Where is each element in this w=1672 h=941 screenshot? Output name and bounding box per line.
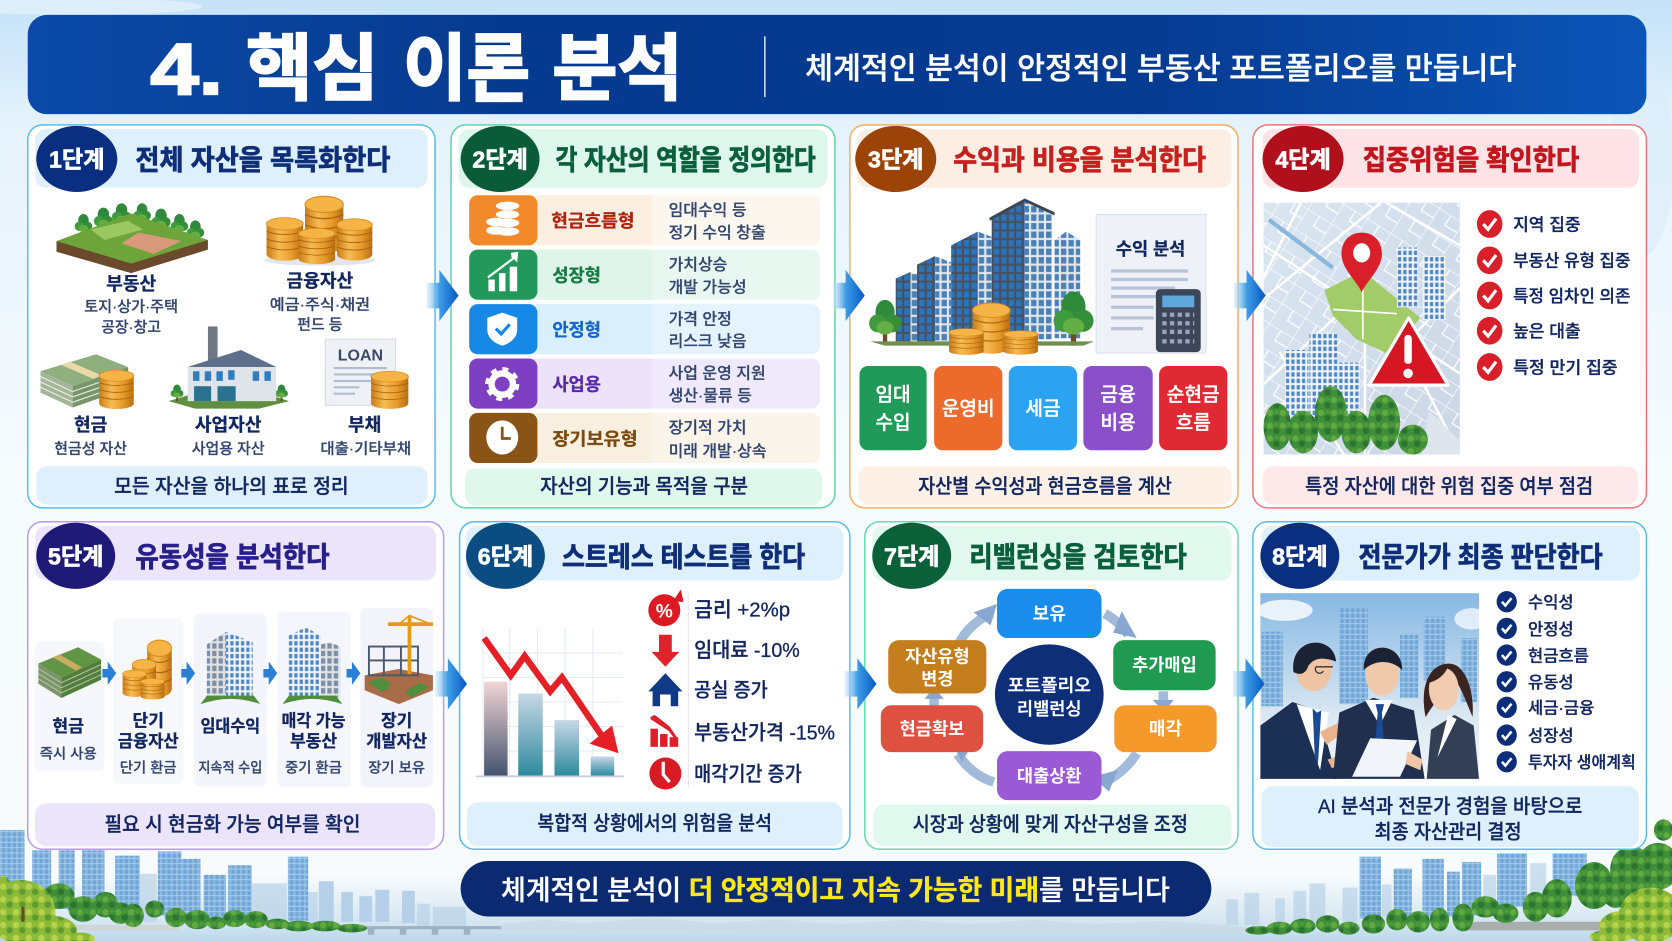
liquidity column: sellable real estate: 부동산	[290, 732, 337, 751]
icon: house	[648, 673, 682, 706]
row: stable	[469, 304, 820, 354]
expert criteria checklist: 현금흐름	[1528, 646, 1589, 665]
step 2 summary: 자산의 기능과 목적을 구분	[540, 476, 748, 498]
cycle node: hold: 보유	[1033, 604, 1066, 624]
cash-flow tiles: 수입	[875, 412, 911, 434]
cash-flow tiles: 흐름	[1176, 413, 1211, 434]
illustration: experts reviewing	[1257, 593, 1489, 779]
liquidity column: cash: 현금	[53, 717, 84, 736]
arrow: step 1 to 2	[427, 270, 459, 321]
step 1 heading	[35, 126, 428, 192]
cycle node: repay loan	[997, 751, 1102, 800]
row: long-term: 미래 개발·상속	[669, 443, 767, 461]
panel: step 5	[28, 522, 444, 849]
cycle node: change asset type: 변경	[921, 669, 953, 689]
illustration: apartment buildings and coins	[869, 198, 1094, 355]
row: stable: 안정형	[552, 320, 601, 340]
expert: center man	[1333, 648, 1425, 779]
liquidity column: short-term financial: 금융자산	[118, 732, 179, 751]
liquidity column: long-term development	[360, 608, 433, 787]
main title: 분석	[552, 29, 682, 110]
liquidity column: sellable real estate	[277, 611, 351, 787]
icon: loan document: LOAN	[338, 348, 383, 365]
step 5 summary: 필요 시 현금화 가능 여부를 확인	[104, 814, 360, 836]
asset: debt	[320, 415, 411, 457]
concentration checklist	[1477, 210, 1630, 381]
cash-flow tiles: 세금	[1025, 398, 1061, 420]
cycle center	[995, 644, 1104, 745]
row: cash flow: 임대수익 등	[669, 202, 747, 220]
step 6 heading	[466, 523, 843, 589]
step 1 summary: 모든 자산을 하나의 표로 정리	[114, 476, 349, 498]
step 3 heading: 3단계	[868, 146, 923, 173]
step 6 summary	[467, 802, 842, 846]
title banner	[28, 15, 1646, 114]
arrow: step 6 to 7	[845, 658, 877, 709]
concentration checklist: 특정 임차인 의존	[1513, 287, 1630, 306]
row: business use: 사업용	[552, 374, 601, 394]
icon: interest rate up	[648, 592, 682, 626]
step 8 heading	[1260, 523, 1640, 589]
step 2 heading	[459, 126, 827, 192]
cycle node: secure cash	[881, 705, 983, 752]
row: long-term: 장기적 가치	[669, 419, 747, 437]
asset: real estate: 토지·상가·주택	[84, 299, 178, 316]
illustration: profit analysis document	[1096, 214, 1206, 353]
icon: loan document	[325, 339, 408, 409]
cycle arrows	[934, 612, 1163, 782]
small flow arrows	[102, 661, 360, 685]
stress scenario list: 금리 +2%p	[694, 599, 790, 622]
step 7 heading: 7단계	[884, 543, 939, 569]
step 5 heading	[35, 523, 436, 589]
row: growth	[469, 250, 820, 300]
cycle center: 포트폴리오	[1008, 675, 1091, 695]
asset: financial: 펀드 등	[297, 317, 343, 334]
row: growth: 가치상승	[669, 256, 727, 274]
asset: cash: 현금성 자산	[54, 440, 127, 457]
step 7 summary: 시장과 상황에 맞게 자산구성을 조정	[913, 814, 1188, 836]
step 3 summary: 자산별 수익성과 현금흐름을 계산	[918, 476, 1172, 498]
step 4 heading	[1263, 126, 1639, 192]
icon: cash	[41, 354, 134, 409]
document in hands	[1352, 738, 1417, 777]
liquidity column: cash	[35, 641, 104, 771]
cycle node: change asset type	[888, 640, 986, 693]
cycle node: sell: 매각	[1149, 719, 1182, 739]
step 5 heading: 5단계	[48, 543, 103, 569]
step 7 heading: 리밸런싱을 검토한다	[969, 542, 1187, 573]
stress scenario list: 임대료 -10%	[694, 639, 800, 662]
row: long-term	[469, 413, 820, 463]
cash-flow tiles: 금융	[1100, 385, 1136, 406]
asset: real estate: 부동산	[106, 274, 156, 294]
expert: left man	[1260, 643, 1351, 779]
step 1 heading: 전체 자산을 목록화한다	[135, 145, 390, 176]
step 5 heading: 유동성을 분석한다	[135, 542, 329, 573]
expert criteria checklist: 성장성	[1528, 726, 1574, 745]
step 7 heading	[872, 523, 1232, 589]
cash-flow tiles: 비용	[1100, 412, 1136, 434]
step 4 summary	[1263, 466, 1638, 505]
step 6 summary: 복합적 상황에서의 위험을 분석	[537, 813, 772, 835]
step 4 heading: 4단계	[1275, 146, 1331, 173]
liquidity column: rental income	[194, 613, 267, 786]
cash-flow tiles: 순현금	[1167, 384, 1220, 406]
icon: calculator	[1156, 289, 1201, 352]
expert criteria checklist: 수익성	[1528, 593, 1574, 612]
expert criteria checklist	[1497, 591, 1636, 772]
liquidity column: long-term development: 장기	[381, 712, 412, 731]
panel: step 3	[850, 125, 1238, 508]
illustration: risk map	[1264, 203, 1460, 454]
liquidity column: sellable real estate: 매각 가능	[282, 712, 345, 731]
step 8 summary: AI 분석과 전문가 경험을 바탕으로	[1318, 796, 1582, 818]
liquidity column: short-term financial: 단기 환금	[120, 759, 177, 776]
icon: interest rate up: %	[656, 602, 673, 623]
expert criteria checklist: 투자자 생애계획	[1528, 753, 1636, 772]
main title: 핵심	[246, 29, 379, 110]
step 5 summary	[35, 803, 435, 846]
panel: step 2	[451, 125, 835, 508]
row: growth: 성장형	[552, 266, 601, 286]
icon: coins	[264, 196, 375, 266]
step 3 summary	[858, 466, 1232, 505]
panel: step 6	[460, 522, 850, 849]
main title: 4.	[150, 29, 223, 110]
row: long-term: 장기보유형	[552, 429, 638, 449]
asset: real estate: 공장·창고	[101, 319, 161, 336]
concentration checklist: 특정 만기 집중	[1513, 358, 1618, 377]
asset: financial: 금융자산	[287, 271, 354, 291]
liquidity column: short-term financial	[113, 619, 183, 784]
concentration checklist: 지역 집중	[1513, 215, 1581, 234]
arrow: step 2 to 3	[833, 270, 865, 321]
expert criteria checklist: 세금·금융	[1528, 699, 1594, 718]
expert criteria checklist: 유동성	[1528, 673, 1574, 692]
liquidity column: rental income: 지속적 수입	[198, 759, 262, 776]
asset: financial	[270, 271, 370, 334]
arrow: step 7 to 8	[1233, 658, 1265, 709]
icon: clock	[649, 757, 681, 790]
illustration: profit analysis document: 수익 분석	[1116, 239, 1185, 259]
liquidity column: short-term financial: 단기	[133, 712, 164, 731]
step 4 summary: 특정 자산에 대한 위험 집중 여부 점검	[1305, 476, 1593, 498]
arrow: step 5 to 6	[435, 658, 467, 709]
asset: real estate	[84, 274, 178, 336]
panel: step 4	[1253, 125, 1646, 508]
asset: business: 사업자산	[195, 415, 262, 435]
row: stable: 가격 안정	[669, 310, 732, 328]
cycle node: repay loan: 대출상환	[1017, 766, 1082, 786]
panel: step 1	[28, 125, 435, 508]
cash-flow tiles: 임대	[875, 384, 911, 406]
row: cash flow: 현금흐름형	[551, 211, 634, 231]
step 3 heading	[855, 126, 1232, 192]
step 8 heading: 전문가가 최종 판단한다	[1358, 542, 1603, 573]
asset: business	[192, 415, 265, 457]
rebalancing cycle	[881, 589, 1217, 800]
step 2 heading: 2단계	[472, 146, 528, 173]
main title	[150, 29, 682, 110]
row: growth: 개발 가능성	[669, 278, 747, 296]
row: business use	[469, 358, 820, 409]
liquidity column: long-term development: 개발자산	[366, 732, 427, 751]
icon: map pin	[1341, 233, 1382, 292]
bottom message banner	[461, 861, 1211, 916]
liquidity column: rental income: 임대수익	[200, 717, 260, 736]
asset: debt: 대출·기타부채	[320, 440, 411, 457]
icon: rent down	[652, 635, 679, 667]
expert: woman	[1424, 664, 1479, 779]
icon: warning	[1369, 318, 1448, 385]
icon: price drop	[650, 715, 678, 747]
step 8 summary: 최종 자산관리 결정	[1374, 822, 1522, 844]
step 2 summary	[465, 468, 822, 506]
step 4 heading: 집중위험을 확인한다	[1363, 145, 1579, 176]
concentration checklist: 높은 대출	[1513, 322, 1581, 341]
liquidity column: sellable real estate: 중기 환금	[285, 759, 342, 776]
row: business use: 생산·물류 등	[669, 387, 752, 405]
stress scenario list	[648, 592, 835, 790]
row: cash flow	[469, 195, 820, 245]
asset: cash	[54, 415, 127, 457]
stress scenario list: 부동산가격 -15%	[694, 721, 835, 744]
asset: financial: 예금·주식·채권	[270, 296, 370, 313]
row: cash flow: 정기 수익 창출	[669, 224, 766, 242]
cycle node: sell	[1114, 705, 1217, 752]
step 6 heading: 스트레스 테스트를 한다	[562, 542, 805, 573]
cycle node: hold	[997, 589, 1102, 638]
step 3 heading: 수익과 비용을 분석한다	[953, 145, 1206, 176]
bottom message banner: 체계적인 분석이 더 안정적이고 지속 가능한 미래를 만듭니다	[501, 874, 1170, 905]
chart: falling bars	[476, 628, 624, 777]
cycle node: change asset type: 자산유형	[905, 647, 970, 667]
icon: land	[57, 203, 208, 273]
subtitle: 체계적인 분석이 안정적인 부동산 포트폴리오를 만듭니다	[805, 51, 1516, 86]
liquidity column: long-term development: 장기 보유	[368, 759, 425, 776]
row: business use: 사업 운영 지원	[669, 365, 766, 383]
step 6 heading: 6단계	[478, 543, 533, 569]
row: stable: 리스크 낮음	[669, 333, 747, 351]
cash-flow tiles	[859, 366, 1227, 450]
cycle center: 리밸런싱	[1017, 699, 1082, 719]
cash-flow tiles: 운영비	[942, 398, 995, 420]
step 1 summary	[36, 466, 428, 505]
cycle node: additional purchase: 추가매입	[1132, 655, 1197, 675]
step 1 heading: 1단계	[49, 146, 104, 173]
step 2 heading: 각 자산의 역할을 정의한다	[556, 145, 816, 176]
expert criteria checklist: 안정성	[1528, 620, 1574, 639]
liquidity column: cash: 즉시 사용	[40, 746, 97, 763]
step 8 heading: 8단계	[1272, 543, 1328, 569]
concentration checklist: 부동산 유형 집중	[1513, 252, 1630, 271]
main title: 이론	[403, 29, 530, 110]
step 8 summary	[1261, 786, 1639, 847]
panel: step 8	[1253, 522, 1646, 849]
step 7 summary	[873, 804, 1232, 846]
icon: factory	[168, 326, 289, 409]
arrow: step 3 to 4	[1234, 270, 1266, 321]
cycle node: secure cash: 현금확보	[900, 719, 964, 739]
asset: cash: 현금	[74, 415, 107, 435]
asset: debt: 부채	[348, 415, 381, 435]
stress scenario list: 매각기간 증가	[694, 763, 802, 786]
asset: business: 사업용 자산	[192, 440, 265, 457]
stress scenario list: 공실 증가	[694, 680, 768, 702]
cycle node: additional purchase	[1113, 640, 1216, 690]
panel: step 7	[865, 522, 1238, 849]
